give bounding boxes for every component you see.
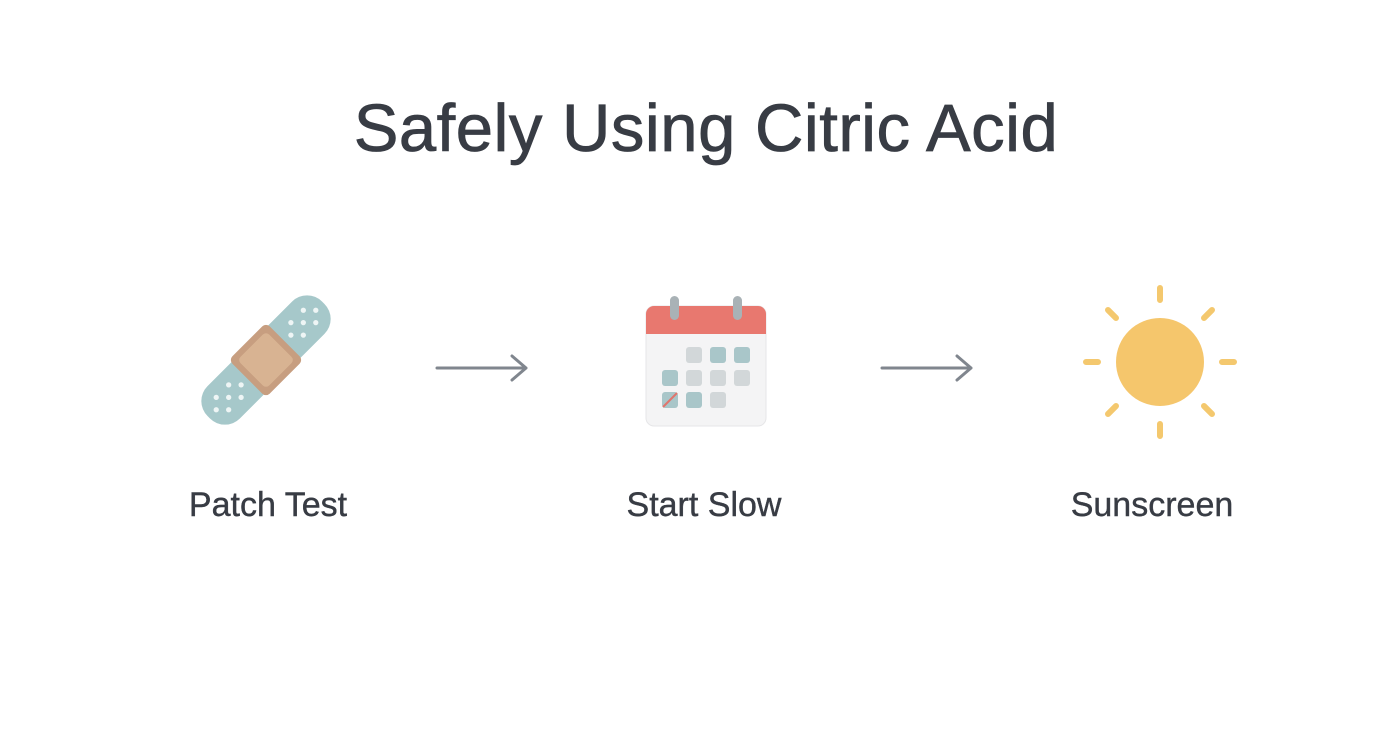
icon: calendar bbox=[646, 296, 766, 426]
arrow 2 bbox=[880, 354, 972, 382]
label: sunscreen: Sunscreen bbox=[1071, 486, 1233, 524]
arrow 1 bbox=[436, 354, 528, 382]
title: Safely Using Citric Acid bbox=[354, 91, 1058, 166]
icon: sun bbox=[1083, 285, 1237, 439]
label: patch test: Patch Test bbox=[189, 486, 347, 524]
label: start slow: Start Slow bbox=[627, 486, 781, 524]
icon: bandage bbox=[201, 295, 331, 425]
